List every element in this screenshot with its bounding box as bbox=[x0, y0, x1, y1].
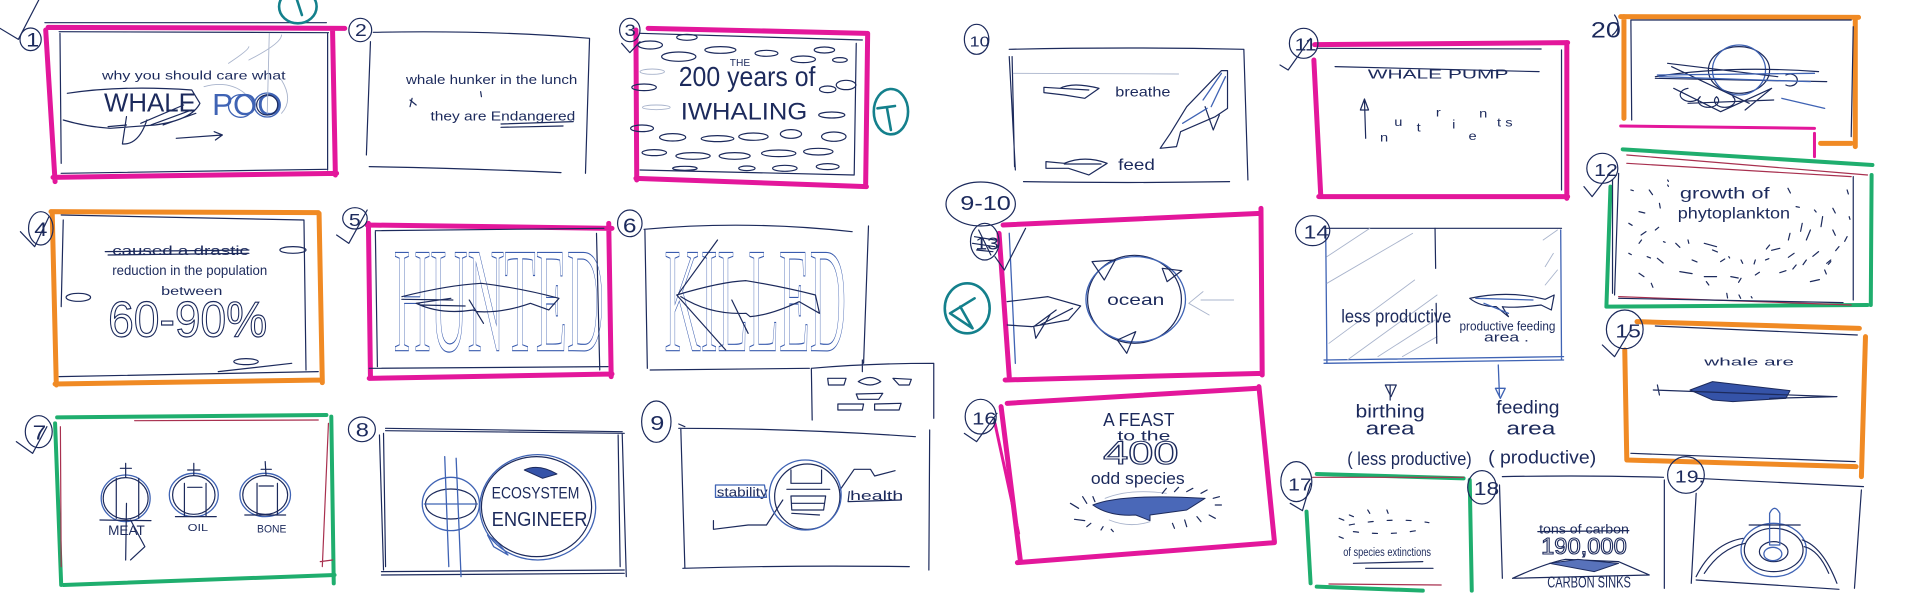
pencil frame bbox=[1613, 173, 1853, 303]
teal marker T bbox=[945, 283, 990, 333]
birthing: birthing bbox=[1355, 401, 1425, 422]
panel 20: orange whale scribble bbox=[1591, 15, 1859, 157]
nutrients letters: u bbox=[1394, 115, 1402, 129]
maroon and pencil frame bbox=[60, 420, 333, 567]
area: area bbox=[1366, 418, 1415, 439]
label area: area . bbox=[1484, 331, 1529, 345]
thumbnail icons bbox=[828, 377, 911, 410]
heading small THE: THE bbox=[730, 58, 750, 69]
steam curves bbox=[204, 33, 288, 113]
WHALE lettering: WHALE bbox=[104, 89, 196, 118]
label health: health bbox=[850, 488, 903, 503]
school of whales bbox=[631, 34, 856, 171]
green frame bbox=[1606, 149, 1872, 307]
number 6 bbox=[618, 210, 642, 237]
number 9-10 bubble bbox=[946, 182, 1015, 226]
number 19: 19. bbox=[1675, 467, 1704, 487]
small whale ellipses bbox=[66, 247, 306, 365]
pencil frame bbox=[1631, 326, 1857, 462]
text: HUNTED bbox=[394, 218, 604, 384]
panel 19: whale fall bbox=[1668, 457, 1863, 589]
heading rule bbox=[1335, 67, 1539, 72]
pencil frame bbox=[369, 228, 608, 370]
number 10 bbox=[964, 24, 990, 54]
number 1 with check: 1 bbox=[26, 29, 39, 51]
ocean cycle ring bbox=[1086, 255, 1185, 353]
text odd species: odd species bbox=[1091, 469, 1185, 488]
big ring with whales bbox=[480, 455, 596, 560]
number 190,000: 190,000 bbox=[1541, 534, 1627, 559]
label BONE: BONE bbox=[257, 522, 286, 535]
number 17 with check bbox=[1281, 462, 1312, 511]
label breathe: breathe bbox=[1115, 85, 1170, 100]
number 20: 20 bbox=[1591, 19, 1621, 43]
pencil frame bbox=[679, 424, 930, 570]
label productive feeding: productive feeding bbox=[1460, 320, 1555, 334]
mound arcs bbox=[1696, 538, 1837, 583]
concentric target and tower bbox=[1741, 508, 1806, 577]
number 2 bbox=[349, 18, 372, 42]
whale top bbox=[1044, 85, 1099, 98]
ENGINEER text: ENGINEER bbox=[492, 507, 588, 530]
whale from left bbox=[1007, 297, 1081, 338]
teal marker T bbox=[874, 89, 908, 134]
ocean label: ocean bbox=[1107, 291, 1164, 309]
number 8: 8 bbox=[356, 419, 369, 441]
number 7 with check bbox=[16, 416, 52, 453]
arrow to feeding bbox=[1495, 365, 1505, 398]
label feed: feed bbox=[1118, 156, 1155, 174]
jar meat bbox=[100, 463, 151, 560]
planet circle bbox=[422, 457, 479, 577]
whale bottom bbox=[1046, 159, 1107, 175]
pencil frame bbox=[1631, 20, 1853, 137]
arrow bbox=[176, 132, 222, 140]
CARBON SINKS: CARBON SINKS bbox=[1547, 573, 1631, 591]
POO lettering: POO bbox=[212, 88, 282, 122]
nutrients letters bbox=[1380, 106, 1513, 144]
maroon lines bbox=[1619, 155, 1868, 305]
nutrients letters: r bbox=[1436, 106, 1441, 119]
caption: of species extinctions bbox=[1343, 545, 1431, 559]
text growth of: growth of bbox=[1680, 184, 1770, 202]
number 3 with check: 3 bbox=[624, 21, 636, 40]
number 7 with check: 7 bbox=[33, 421, 46, 444]
faint water line bbox=[1013, 72, 1179, 75]
hatched number with check: 13 bbox=[975, 234, 999, 254]
hatched number with check bbox=[970, 223, 1026, 270]
panel 8: ecosystem engineer bbox=[348, 417, 626, 577]
jar bone bbox=[240, 462, 290, 517]
up arrow bbox=[1360, 99, 1369, 138]
pencil frame bbox=[1691, 478, 1863, 589]
heading 200 years of: 200 years of bbox=[679, 61, 816, 92]
heading WHALE PUMP: WHALE PUMP bbox=[1368, 67, 1508, 81]
arrow to birthing bbox=[1385, 385, 1396, 400]
small thumbnail sketch bbox=[811, 360, 934, 420]
magenta frame bbox=[1314, 43, 1568, 198]
magenta frame bbox=[367, 223, 612, 378]
caption line 3: between bbox=[161, 284, 222, 298]
panel 14: less productive and productive feeding area bbox=[1296, 216, 1564, 400]
whale across letters bbox=[677, 240, 820, 350]
breaching whale bbox=[1160, 71, 1228, 148]
struck caption: tons of carbon bbox=[1539, 522, 1629, 536]
number 19 bbox=[1668, 457, 1704, 493]
slide text line 1: whale hunker in the lunch bbox=[405, 72, 577, 87]
teal marker circle bbox=[279, 0, 317, 23]
label health bbox=[840, 469, 903, 503]
nutrients letters: s bbox=[1505, 116, 1513, 129]
text phytoplankton: phytoplankton bbox=[1678, 204, 1790, 222]
green frame bbox=[55, 415, 335, 585]
number 16 with check bbox=[964, 399, 997, 442]
text: KILLED bbox=[664, 218, 846, 384]
faint right arrow bbox=[1189, 292, 1234, 315]
magenta frame bbox=[1001, 387, 1274, 563]
number 16 with check: 16 bbox=[972, 409, 997, 429]
nutrients letters: i bbox=[1452, 118, 1455, 131]
pencil frame bbox=[644, 225, 868, 370]
panel 5: HUNTED lettering bbox=[337, 208, 612, 384]
pencil border bbox=[45, 23, 328, 173]
carcass mound bbox=[1513, 559, 1649, 578]
number 15 with check bbox=[1602, 310, 1643, 357]
magenta frame bbox=[46, 27, 345, 182]
panel 11: whale pump bbox=[1280, 28, 1568, 198]
number 9: 9 bbox=[650, 411, 664, 434]
magenta frame bbox=[999, 208, 1262, 380]
feast whale bbox=[1093, 492, 1205, 525]
dashed divider bbox=[1435, 228, 1437, 363]
ECOSYSTEM text: ECOSYSTEM bbox=[492, 483, 579, 502]
label stability: stability bbox=[717, 485, 769, 499]
magenta frame bbox=[636, 28, 868, 187]
blue frame sides bbox=[1324, 230, 1564, 363]
scribbled whale and sun bbox=[1655, 45, 1827, 112]
productive: ( productive) bbox=[1488, 447, 1596, 468]
jar oil bbox=[169, 463, 218, 517]
nutrients letters: n bbox=[1479, 107, 1487, 120]
pencil frame bbox=[1500, 476, 1664, 588]
pencil frame bbox=[59, 215, 318, 377]
panel 17: species extinctions bbox=[1281, 462, 1472, 591]
feeding: feeding bbox=[1496, 397, 1559, 418]
nutrients letters: n bbox=[1380, 131, 1388, 144]
pencil frame bbox=[366, 32, 590, 173]
plankton specks bbox=[1629, 180, 1850, 298]
heading: why you should care what bbox=[101, 69, 286, 82]
panel 4: 60-90% reduction bbox=[20, 212, 322, 385]
diagonal hatching bbox=[1327, 228, 1557, 360]
panel 3: the 200 years of whaling bbox=[620, 18, 908, 187]
whale bbox=[1470, 294, 1554, 317]
nutrients letters: t bbox=[1497, 116, 1501, 129]
heading WHALING: IWHALING bbox=[681, 98, 807, 125]
number 9-10 bubble: 9-10 bbox=[960, 191, 1011, 214]
number 5 with check bbox=[337, 208, 367, 243]
panel 16: a feast to the 400 odd species bbox=[964, 387, 1274, 563]
panel 10: breathe and feed bbox=[964, 24, 1248, 182]
area right: area bbox=[1506, 418, 1556, 439]
label less productive: less productive bbox=[1341, 307, 1451, 327]
panel 12: growth of phytoplankton bbox=[1584, 149, 1872, 307]
number 8 bbox=[348, 417, 375, 442]
number 6: 6 bbox=[623, 215, 636, 237]
text 400: 400 bbox=[1103, 435, 1179, 471]
caption line 2: reduction in the population bbox=[112, 263, 267, 279]
annotations: birthing and feeding areas bbox=[1347, 397, 1596, 469]
central circle icon bbox=[769, 460, 841, 530]
number 3 with check bbox=[620, 18, 640, 53]
dotted whale outline bbox=[1339, 510, 1429, 538]
whale drawing bbox=[63, 88, 200, 144]
number 5 with check: 5 bbox=[349, 211, 361, 230]
orange frame bbox=[1621, 17, 1859, 147]
underlines bbox=[1353, 562, 1433, 568]
empty label bbox=[713, 500, 783, 529]
label MEAT: MEAT bbox=[108, 523, 145, 539]
large percentage: 60-90% bbox=[108, 291, 267, 347]
panel 9-10: ocean cycle bbox=[945, 182, 1262, 380]
text A FEAST: A FEAST bbox=[1103, 410, 1175, 430]
pencil frame bbox=[379, 428, 626, 577]
panel 2: whale hunters text slide bbox=[349, 18, 590, 173]
underline and marks bbox=[410, 92, 573, 127]
caption: whale are bbox=[1703, 356, 1794, 368]
number 12 with check: 12 bbox=[1594, 161, 1618, 180]
label OIL: OIL bbox=[188, 523, 208, 534]
orange frame bbox=[51, 212, 322, 385]
number 14 bbox=[1296, 216, 1330, 246]
number 2: 2 bbox=[355, 21, 367, 40]
number 17 with check: 17 bbox=[1288, 475, 1312, 495]
number 11 with check: 11 bbox=[1295, 35, 1317, 55]
whale across letters bbox=[402, 283, 559, 323]
maroon lines bbox=[1313, 477, 1464, 585]
panel 1: why you should care about whale poo bbox=[0, 0, 345, 182]
panel 15: whale carcass orange frame bbox=[1602, 310, 1865, 477]
panel 7: meat oil bone bbox=[16, 415, 335, 585]
number 15 with check: 15 bbox=[1615, 321, 1641, 342]
number 10: 10 bbox=[970, 34, 990, 50]
number 9 bbox=[642, 401, 671, 442]
panel 6: KILLED lettering bbox=[618, 210, 868, 384]
number 18: 18 bbox=[1474, 479, 1499, 499]
pencil frame bbox=[1317, 48, 1562, 190]
number 12 with check bbox=[1584, 153, 1618, 197]
nutrients letters: e bbox=[1468, 129, 1477, 143]
pink lower edge bbox=[1621, 126, 1814, 157]
nutrients letters: t bbox=[1417, 121, 1421, 134]
pencil frame bbox=[640, 33, 862, 175]
orange frame bbox=[1625, 322, 1865, 477]
number 18 bbox=[1468, 471, 1499, 504]
number 11 with check bbox=[1280, 28, 1318, 70]
panel 9: stability and health bbox=[642, 401, 930, 570]
number 4 with check: 4 bbox=[34, 218, 47, 240]
rays around whale bbox=[1070, 487, 1221, 532]
less productive: ( less productive) bbox=[1347, 449, 1472, 469]
pencil frame bbox=[1325, 227, 1562, 229]
struck-through caption: caused a drastic bbox=[112, 243, 249, 258]
thumbnail frame bbox=[811, 360, 934, 420]
panel 18: tons of carbon bbox=[1468, 471, 1664, 591]
number 14: 14 bbox=[1304, 222, 1329, 243]
blue whale bbox=[1653, 382, 1837, 402]
number 4 with check bbox=[20, 212, 53, 247]
text to the: to the bbox=[1117, 429, 1170, 444]
inner pink line bbox=[995, 423, 1019, 533]
green frame bbox=[1307, 474, 1472, 591]
number 1 with check bbox=[0, 0, 41, 51]
pencil frame line bbox=[1009, 233, 1015, 363]
slide text line 2: they are Endangered bbox=[430, 109, 575, 123]
pencil frame bbox=[1009, 48, 1248, 182]
